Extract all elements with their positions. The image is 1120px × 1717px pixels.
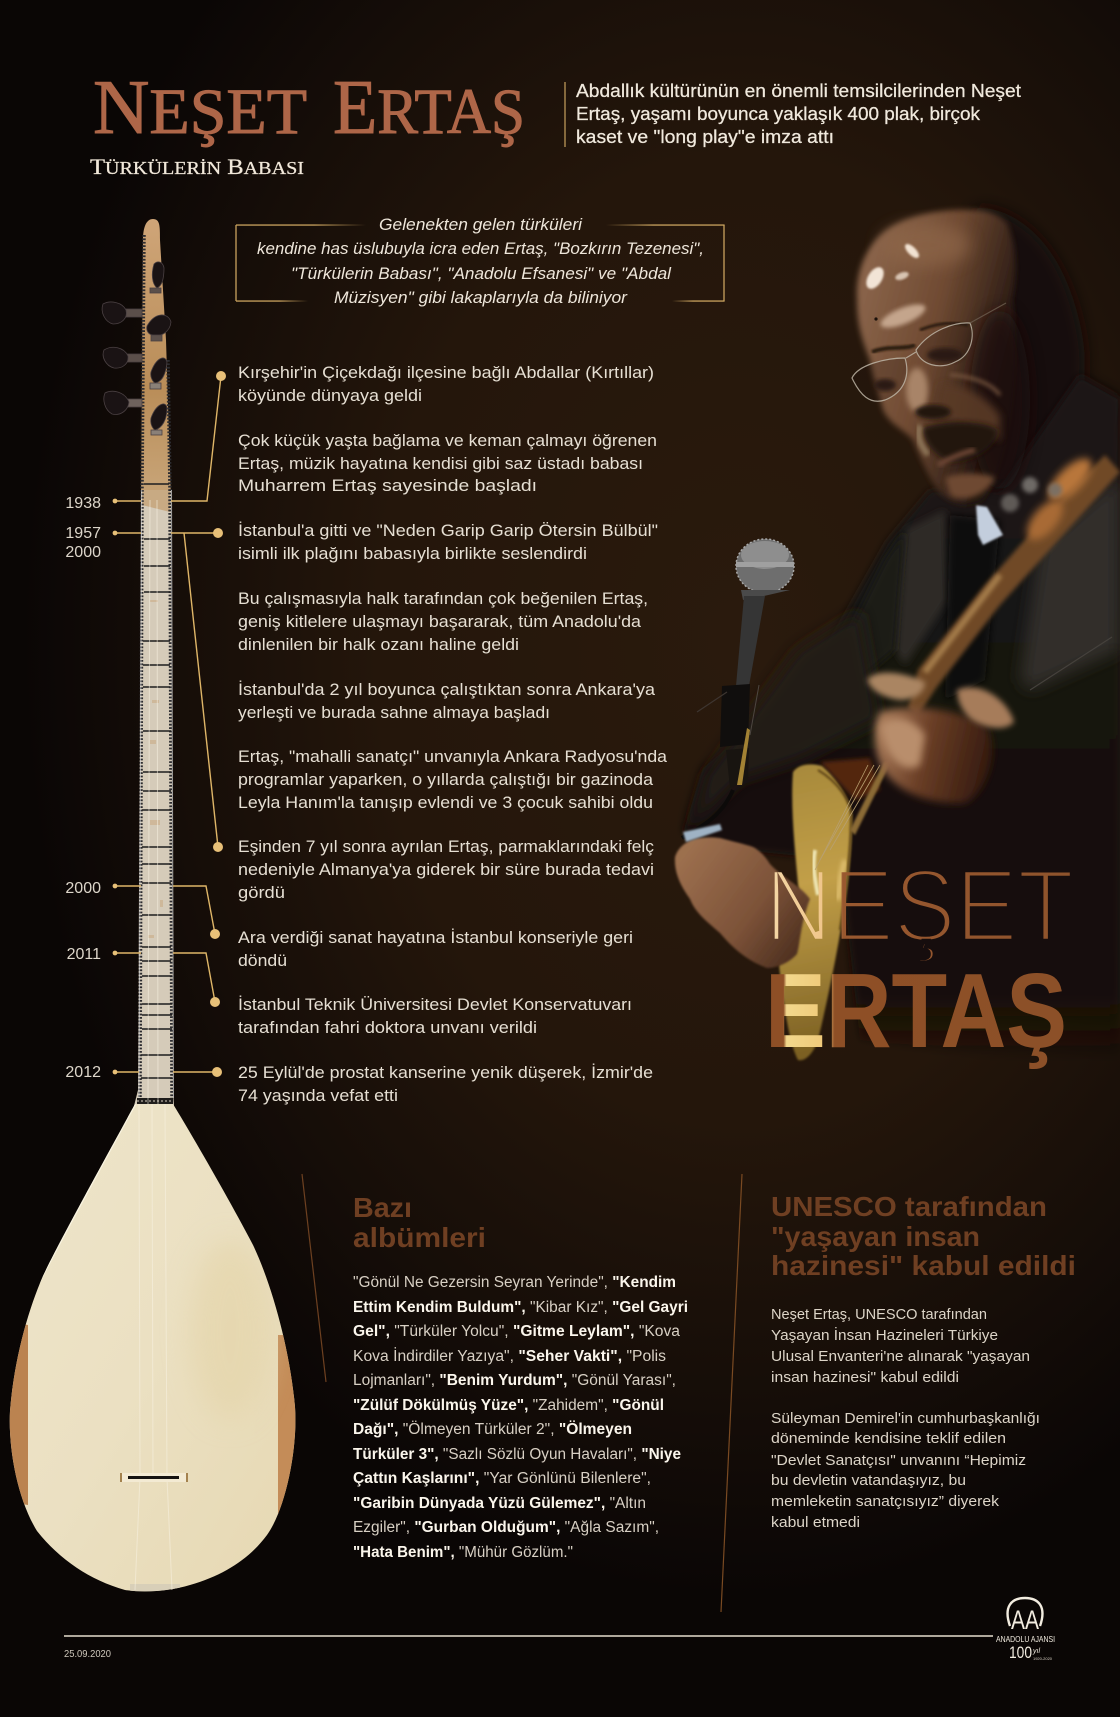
timeline text: 74 yaşında vefat etti <box>238 1086 398 1105</box>
timeline years: 2000 <box>65 544 101 561</box>
timeline text: dinlenilen bir halk ozanı haline geldi <box>238 635 519 654</box>
upper hand <box>867 673 1014 803</box>
icon: AA arch: AA <box>1011 1605 1039 1635</box>
quote box: Gelenekten gelen türküleri <box>379 215 583 234</box>
albums text: "Gönül Ne Gezersin Seyran Yerinde", "Kendim <box>353 1274 676 1291</box>
UNESCO text: "Devlet Sanatçısı" unvanını “Hepimiz <box>771 1452 1026 1469</box>
albums text: "Garibin Dünyada Yüzü Gülemez", "Altın <box>353 1495 646 1512</box>
timeline text: İstanbul'a gitti ve "Neden Garip Garip Ötersin Bülbül" <box>238 521 658 540</box>
UNESCO text: bu devletin vatandaşıyız, bu <box>771 1472 966 1489</box>
heading: albums: Bazı <box>353 1192 412 1223</box>
UNESCO text <box>771 1306 1040 1531</box>
lower hand <box>675 837 810 968</box>
heading: albums: albümleri <box>353 1222 486 1253</box>
title: NEŞET <box>93 64 307 150</box>
shirt collar <box>976 505 1003 545</box>
logo: Anadolu Ajansi: 1920-2020 <box>1033 1656 1053 1661</box>
quote box: "Türkülerin Babası", "Anadolu Efsanesi" ve "Abdal <box>291 264 672 283</box>
bridge <box>120 1473 188 1482</box>
albums text: Ezgiler", "Gurban Olduğum", "Ağla Sazım", <box>353 1519 659 1536</box>
heading: UNESCO <box>771 1191 1076 1281</box>
microphone <box>682 539 794 838</box>
timeline years: 2000 <box>65 880 101 897</box>
timeline text <box>238 363 668 1105</box>
albums text: Lojmanları", "Benim Yurdum", "Gönül Yarası", <box>353 1372 676 1389</box>
jacket right panel <box>1020 475 1120 690</box>
head <box>857 210 1015 505</box>
timeline text: Ertaş, müzik hayatına kendisi gibi saz üstadı babası <box>238 454 643 473</box>
albums text: Ettim Kendim Buldum", "Kibar Kız", "Gel Gayri <box>353 1299 688 1316</box>
saz instrument <box>0 219 310 1594</box>
albums text: Kova İndirdiler Yazıya", "Seher Vakti", "Polis <box>353 1347 666 1365</box>
timeline years: 2011 <box>67 946 101 963</box>
UNESCO text: insan hazinesi" kabul edildi <box>771 1369 959 1386</box>
date: 25.09.2020 <box>64 1648 111 1660</box>
UNESCO text: memleketin sanatçısıyız” diyerek <box>771 1493 1000 1510</box>
tuning pegs <box>102 262 171 435</box>
head shadow and hair <box>973 208 1120 520</box>
timeline text: 25 Eylül'de prostat kanserine yenik düşerek, İzmir'de <box>238 1063 653 1082</box>
timeline text: yerleşti ve burada sahne almaya başladı <box>238 703 550 722</box>
glasses <box>852 303 1006 401</box>
timeline text: gördü <box>238 883 285 902</box>
UNESCO text: Neşet Ertaş, UNESCO tarafından <box>771 1306 987 1323</box>
timeline text: programlar yaparken, o yıllarda çalıştığı bir gazinoda <box>238 770 654 789</box>
timeline text: isimli ilk plağını babasıyla birlikte seslendirdi <box>238 544 587 563</box>
saz neck in photo <box>815 452 1120 870</box>
jacket sleeve <box>690 610 880 830</box>
timeline text: Muharrem Ertaş sayesinde başladı <box>238 476 537 495</box>
albums text: Gel", "Türküler Yolcu", "Gitme Leylam", "Kova <box>353 1323 680 1340</box>
divider: unesco left <box>721 1174 742 1612</box>
albums text <box>353 1274 688 1561</box>
quote box <box>236 215 725 307</box>
jacket and body <box>683 375 1120 1067</box>
neck edge inlay <box>140 235 172 1098</box>
timeline text: Ertaş, "mahalli sanatçı" unvanıyla Ankara Radyosu'nda <box>238 747 668 766</box>
quote box: kendine has üslubuyla icra eden Ertaş, "Bozkırın Tezenesi", <box>257 239 704 258</box>
timeline text: Çok küçük yaşta bağlama ve keman çalmayı öğrenen <box>238 431 657 450</box>
timeline years: 1938 <box>65 495 101 512</box>
saz body in photo <box>779 764 852 1060</box>
UNESCO text: döneminde kendisine teklif edilen <box>771 1430 1006 1447</box>
albums text: Türküler 3", "Sazlı Sözlü Oyun Havaları", "Niye <box>353 1446 681 1463</box>
jacket pocket line <box>1030 637 1112 690</box>
saz body <box>10 1104 295 1591</box>
logo: Anadolu Ajansi: ANADOLU AJANSI <box>996 1634 1055 1644</box>
intro text <box>576 81 1021 147</box>
quote box: Müzisyen" gibi lakaplarıyla da biliniyor <box>334 288 628 307</box>
UNESCO text: kabul etmedi <box>771 1514 860 1531</box>
timeline text: İstanbul Teknik Üniversitesi Devlet Konservatuvarı <box>238 995 632 1014</box>
face modelling <box>863 223 1030 499</box>
subtitle: TÜRKÜLERİN BABASI <box>90 154 304 179</box>
intro text: Ertaş, yaşamı boyunca yaklaşık 400 plak, birçok <box>576 104 981 124</box>
saz head <box>141 219 171 500</box>
timeline leader lines <box>115 376 221 1072</box>
overlay title ERTAŞ: ERTAŞ <box>765 952 1067 1070</box>
shirt and tie shadow <box>945 515 1000 700</box>
logo: Anadolu Ajansi: 100 <box>1009 1643 1032 1662</box>
heading: UNESCO: hazinesi" kabul edildi <box>771 1250 1076 1281</box>
UNESCO text: Ulusal Envanteri'ne alınarak "yaşayan <box>771 1348 1030 1365</box>
title <box>93 64 525 150</box>
jacket left lapel <box>895 510 948 665</box>
albums text: "Zülüf Dökülmüş Yüze", "Zahidem", "Gönül <box>353 1397 664 1414</box>
albums text: Çattın Kaşlarını", "Yar Gönlünü Bilenlere", <box>353 1470 651 1487</box>
heading: albums <box>353 1192 486 1253</box>
timeline years <box>65 495 101 1081</box>
saz neck <box>134 490 174 1106</box>
heading: UNESCO: "yaşayan insan <box>771 1221 980 1252</box>
intro text: kaset ve "long play"e imza attı <box>576 127 834 147</box>
UNESCO text: Süleyman Demirel'in cumhurbaşkanlığı <box>771 1410 1040 1427</box>
timeline text: geniş kitlelere ulaşmayı başararak, tüm Anadolu'da <box>238 612 642 631</box>
portrait photo of Neşet Ertaş <box>675 208 1120 1070</box>
timeline text: köyünde dünyaya geldi <box>238 386 422 405</box>
timeline text: nedeniyle Almanya'ya giderek bir süre burada tedavi <box>238 860 654 879</box>
intro text: Abdallık kültürünün en önemli temsilcilerinden Neşet <box>576 81 1021 101</box>
timeline years: 1957 <box>65 525 101 542</box>
overlay title NEŞET: NEŞET <box>765 848 1074 963</box>
nut at neck base <box>137 1098 173 1105</box>
timeline text: tarafından fahri doktora unvanı verildi <box>238 1018 537 1037</box>
timeline text: Eşinden 7 yıl sonra ayrılan Ertaş, parmaklarındaki felç <box>238 837 654 856</box>
albums text: Dağı", "Ölmeyen Türküler 2", "Ölmeyen <box>353 1420 632 1438</box>
footer rule <box>64 1635 993 1637</box>
title: ERTAŞ <box>333 64 525 150</box>
timeline text: Kırşehir'in Çiçekdağı ilçesine bağlı Abdallar (Kırtıllar) <box>238 363 654 382</box>
timeline text: İstanbul'da 2 yıl boyunca çalıştıktan sonra Ankara'ya <box>238 680 656 699</box>
shirt cuff <box>683 824 722 842</box>
albums text: "Hata Benim", "Mühür Gözlüm." <box>353 1544 573 1561</box>
timeline dots <box>113 371 226 1077</box>
frets <box>141 484 172 1078</box>
heading: UNESCO: UNESCO tarafından <box>771 1191 1047 1222</box>
UNESCO text: Yaşayan İnsan Hazineleri Türkiye <box>771 1326 998 1344</box>
strings <box>135 500 172 1590</box>
logo: Anadolu Ajansi <box>996 1598 1055 1662</box>
timeline years: 2012 <box>65 1064 101 1081</box>
divider: albums left <box>302 1174 326 1382</box>
timeline text: Bu çalışmasıyla halk tarafından çok beğenilen Ertaş, <box>238 589 648 608</box>
divider: header <box>564 82 566 147</box>
timeline text: Leyla Hanım'la tanışıp evlendi ve 3 çocuk sahibi oldu <box>238 793 653 812</box>
reddish saz back <box>820 758 880 800</box>
timeline text: Ara verdiği sanat hayatına İstanbul konseriyle geri <box>238 928 633 947</box>
neck grain <box>148 600 163 938</box>
timeline text: döndü <box>238 951 287 970</box>
logo: Anadolu Ajansi: yıl <box>1032 1648 1040 1655</box>
